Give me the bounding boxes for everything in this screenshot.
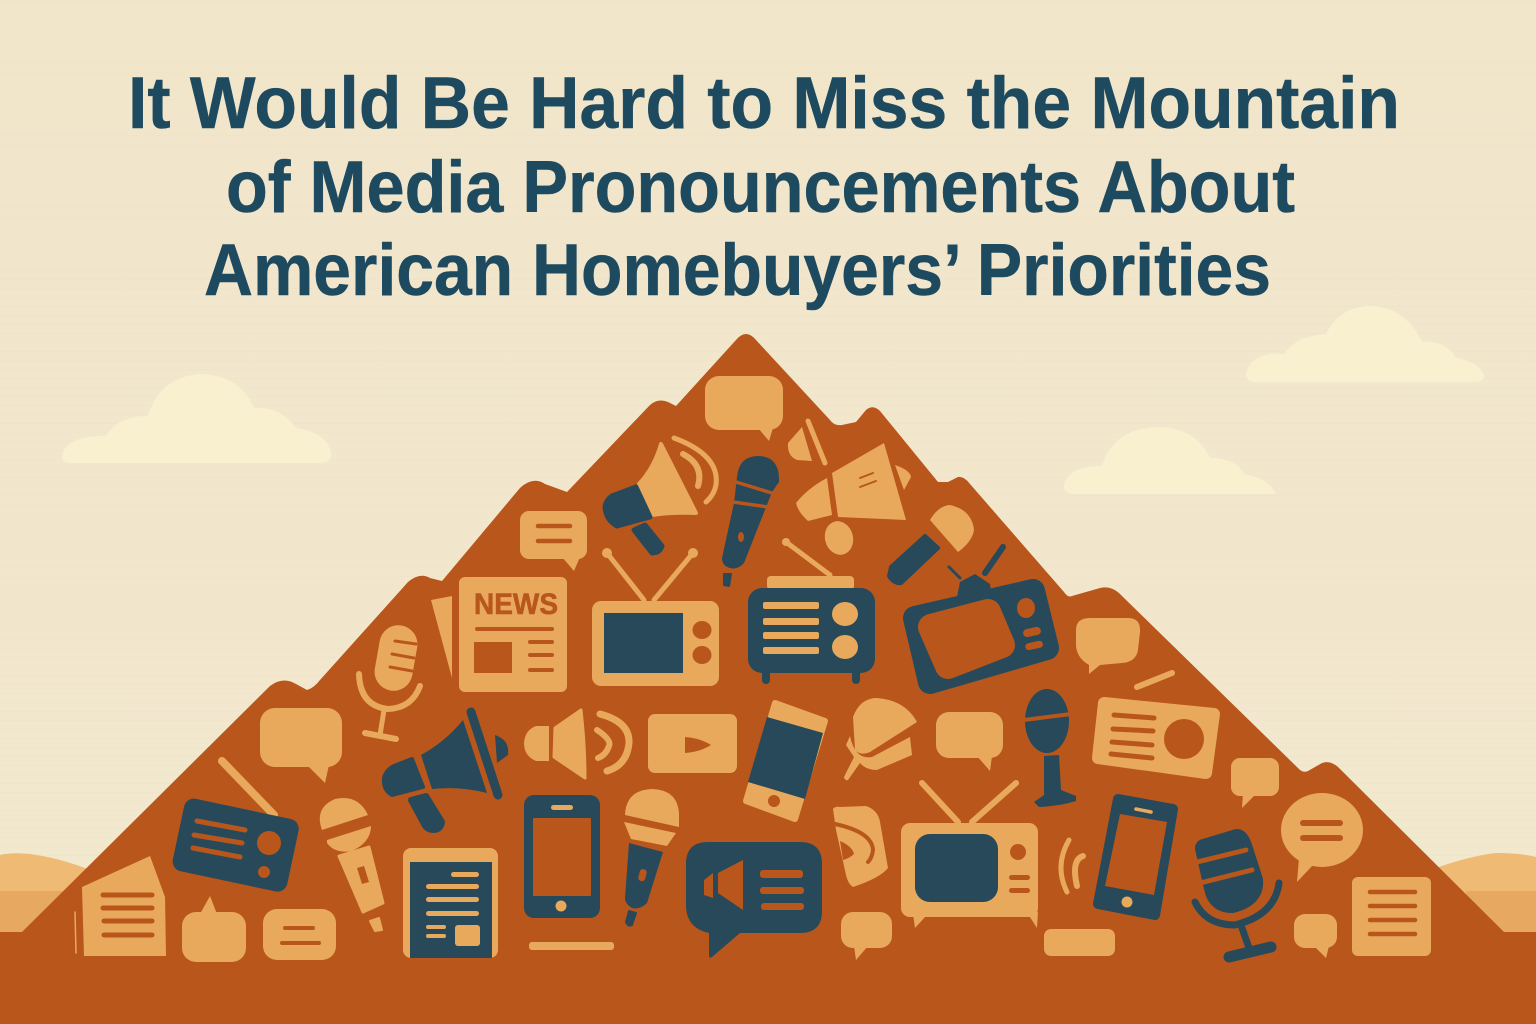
icon: megaphone with sound waves (605, 438, 716, 553)
icon: helmet bubble (844, 698, 917, 780)
icon: large speech bubble left (260, 708, 342, 783)
icon: light radio (1098, 673, 1214, 773)
icon: small bubble under card (841, 912, 892, 960)
icon: small bubble right (1076, 618, 1140, 674)
icon: dark studio microphone (1195, 838, 1279, 957)
icon: two tone microphone (624, 789, 679, 926)
icon: document bottom right (1352, 877, 1431, 956)
title: It Would Be Hard to Miss the Mountain (128, 63, 1400, 144)
icon: speech bubble with lines (520, 511, 587, 571)
icon: bubble with up tail (182, 896, 246, 962)
icon: pill bubble with lines (263, 909, 336, 960)
icon: newspaper: NEWS (474, 588, 558, 621)
icon: light microphone lower left (320, 798, 383, 931)
icon: large dark megaphone (384, 712, 508, 830)
cloud: middle right (1064, 427, 1276, 494)
icon: dark phone (524, 795, 600, 918)
icon: top speech bubble (705, 376, 783, 441)
icon: blank bubble (1044, 929, 1115, 956)
icon: light TV (592, 548, 719, 686)
icon: light desk microphone (359, 622, 420, 739)
icon: small bubble far right (1231, 758, 1279, 808)
hill: left (0, 853, 90, 932)
mountain (0, 334, 1536, 1024)
icon: light megaphone (796, 443, 911, 558)
cloud: left (62, 374, 331, 463)
icon: dark standing microphone (1024, 689, 1076, 807)
icon: video player (648, 714, 737, 773)
icon: half dome speaker (788, 421, 825, 463)
icon: round speech bubble (1281, 793, 1363, 882)
icon: small bubble centre (936, 712, 1003, 771)
icon: dark document (403, 848, 498, 958)
icon: newspaper (431, 577, 567, 692)
icon: dark radio lower left (171, 761, 301, 893)
icon: light TV lower (901, 783, 1038, 928)
icon: dark tilted TV (915, 547, 1047, 682)
icon: tilted phone (746, 703, 825, 819)
icon: speaker with waves (524, 710, 629, 778)
icon: dark bubble with speaker (686, 842, 822, 958)
icons group (75, 376, 1431, 962)
icon: split microphone (889, 505, 974, 583)
cloud: upper right (1246, 306, 1484, 382)
icon: small bubble bottom right (1294, 914, 1337, 958)
icon: sound wave card (833, 806, 888, 887)
icon: tilted dark phone (1098, 799, 1173, 915)
title: American Homebuyers’ Priorities (204, 230, 1271, 311)
title: of Media Pronouncements About (226, 147, 1295, 228)
icon: bar below phone (529, 942, 614, 950)
icon: folded document lower left (75, 856, 166, 956)
icon: dark radio (748, 538, 875, 680)
icon: dark microphone (722, 456, 779, 586)
title (128, 63, 1400, 311)
hill: right (1436, 853, 1536, 932)
icon: sound waves right (1061, 840, 1083, 892)
